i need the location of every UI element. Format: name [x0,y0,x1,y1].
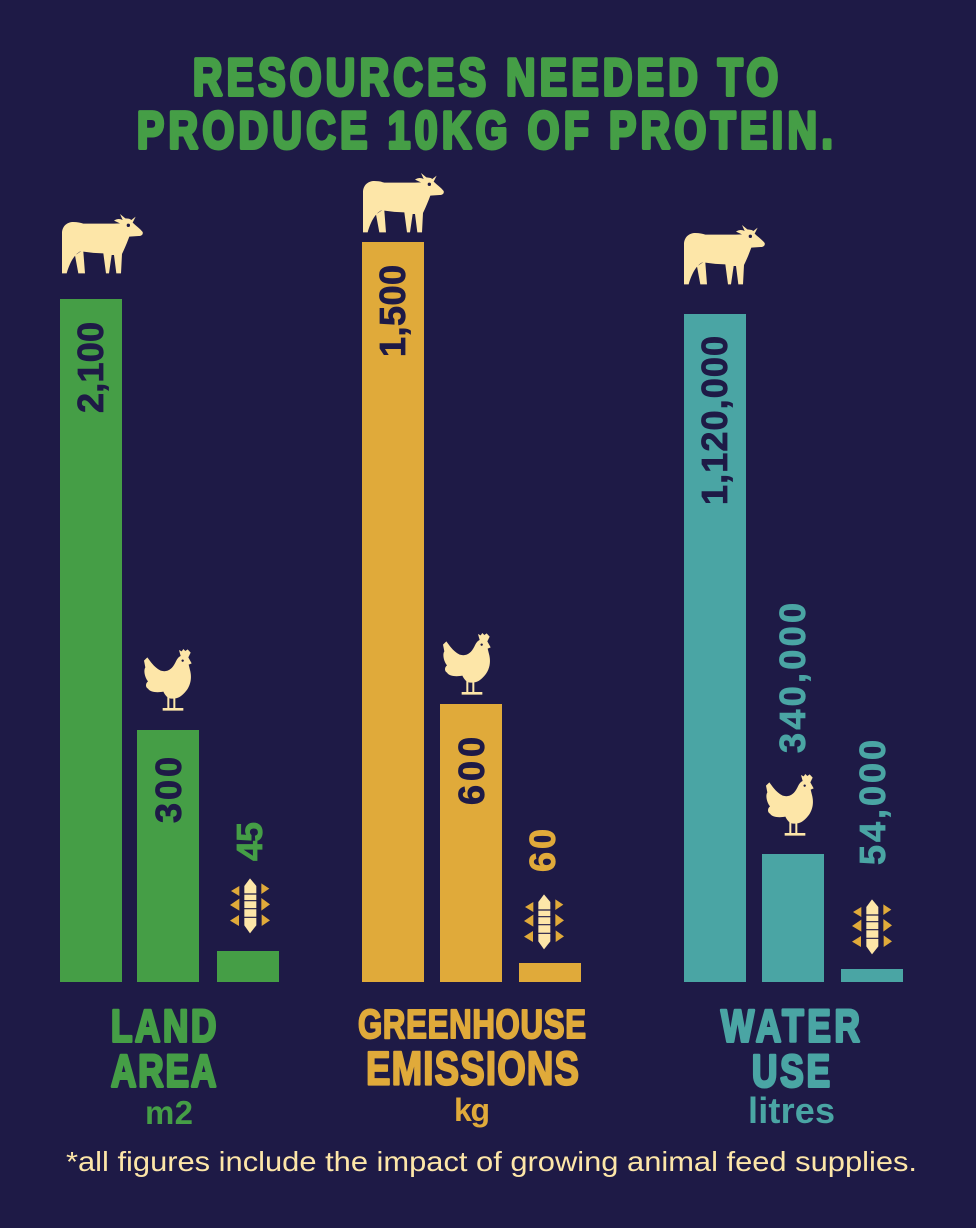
value: 54,000: 54,000 [852,740,893,865]
bar: land area chicken [137,730,199,982]
label: land area: m2 [145,1094,193,1131]
bar: water insect [841,969,903,982]
value: 600: 600 [451,737,492,805]
panel: water use [684,225,903,1131]
label: water use: litres [748,1090,835,1131]
icon: insect [852,899,892,954]
footnote: *all figures include the impact of growing animal feed supplies. [66,1146,917,1177]
bar: greenhouse chicken [440,704,502,982]
bar: land area insect [217,951,279,982]
icon: insect [524,894,564,949]
icon: chicken [766,774,814,836]
icon: chicken [144,649,192,711]
bar: greenhouse insect [519,963,581,982]
label: greenhouse emissions: GREENHOUSE [358,1001,586,1047]
icon: chicken [443,633,491,695]
label: greenhouse emissions: kg [454,1092,490,1128]
icon: cow [363,173,444,232]
label: land area: LAND [111,1000,216,1052]
value: 1,120,000: 1,120,000 [694,336,735,505]
value: 1,500: 1,500 [372,265,413,357]
label: land area: AREA [111,1045,216,1097]
value: 60: 60 [522,829,563,872]
label: water use [721,1000,860,1131]
bar: land area cow [60,299,122,982]
bar: water cow [684,314,746,982]
title: PRODUCE 10KG OF PROTEIN. [137,101,833,159]
title [137,48,833,159]
label: water use: WATER [721,1000,860,1052]
value: 2,100: 2,100 [70,322,111,413]
label: greenhouse emissions: EMISSIONS [366,1042,579,1095]
value: 340,000: 340,000 [772,603,813,753]
label: water use: USE [752,1045,830,1097]
label: greenhouse emissions [358,1001,586,1128]
value: 300: 300 [148,757,189,823]
icon: cow [62,214,143,273]
value: 45: 45 [229,822,270,861]
panel: greenhouse emissions [358,173,586,1128]
bar: greenhouse cow [362,242,424,982]
icon: cow [684,225,765,284]
bar: water chicken [762,854,824,982]
icon: insect [230,878,270,933]
panel: land area [60,214,279,1131]
title: RESOURCES NEEDED TO [193,48,778,106]
label: land area [111,1000,216,1131]
